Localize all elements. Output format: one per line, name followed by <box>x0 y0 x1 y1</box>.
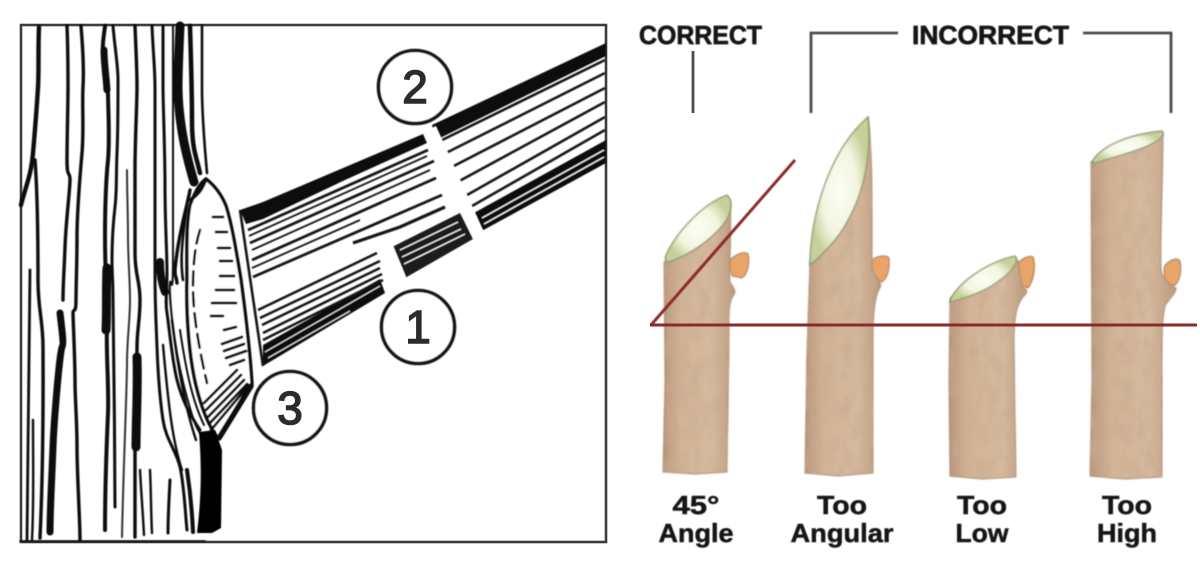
label: 45 degree angle: Angle <box>658 518 734 548</box>
bud <box>1015 256 1034 288</box>
label: 45 degree angle <box>658 490 734 548</box>
bud <box>870 256 889 282</box>
tree branch <box>240 43 606 366</box>
angled cut face <box>665 195 731 262</box>
tree trunk bark lines <box>20 26 207 541</box>
label: 45 degree angle: 45° <box>672 490 720 520</box>
stub: too high cut <box>1090 131 1181 479</box>
angled cut face <box>1092 131 1163 163</box>
label: too angular: Angular <box>790 518 894 548</box>
stub: too low cut <box>949 256 1034 479</box>
first undercut mark <box>377 240 410 290</box>
branch section near collar <box>240 134 473 366</box>
reference line: 45 degree <box>651 160 795 325</box>
callout 3: 3 <box>277 382 303 434</box>
label: too high <box>1097 490 1157 548</box>
label: too high: High <box>1097 518 1157 548</box>
panel: cut angle comparison <box>639 20 1197 548</box>
stub body <box>663 200 735 474</box>
stub body <box>1090 133 1176 479</box>
stub: too angular cut <box>805 117 889 476</box>
stub body <box>949 260 1027 479</box>
reference line: horizontal <box>650 324 1197 326</box>
callout 3 <box>254 372 326 444</box>
callout 1: 1 <box>405 301 431 353</box>
label: too high: Too <box>1102 490 1152 520</box>
stub: 45 degree angle cut <box>663 195 749 474</box>
callout 1 <box>382 290 454 364</box>
stub body <box>805 118 881 476</box>
label: too low: Low <box>956 518 1009 548</box>
bracket: correct <box>692 51 694 113</box>
panel frame <box>21 25 606 542</box>
label: too angular: Too <box>817 490 867 520</box>
second cut gap <box>425 126 484 238</box>
bracket: incorrect <box>811 33 1171 113</box>
label: too low <box>956 490 1009 548</box>
heading: incorrect: INCORRECT <box>912 20 1069 50</box>
heading: correct: CORRECT <box>639 20 762 50</box>
branch section beyond second cut <box>432 43 606 233</box>
branch collar <box>187 179 252 438</box>
bud <box>728 253 749 278</box>
callout 2: 2 <box>402 61 428 113</box>
trunk base shadow <box>197 430 222 533</box>
angled cut face <box>810 117 869 265</box>
bud <box>1164 259 1181 286</box>
label: too low: Too <box>957 490 1007 520</box>
angled cut face <box>950 256 1017 302</box>
label: too angular <box>790 490 894 548</box>
callout 2 <box>378 50 452 124</box>
panel: branch pruning line drawing <box>20 25 606 542</box>
